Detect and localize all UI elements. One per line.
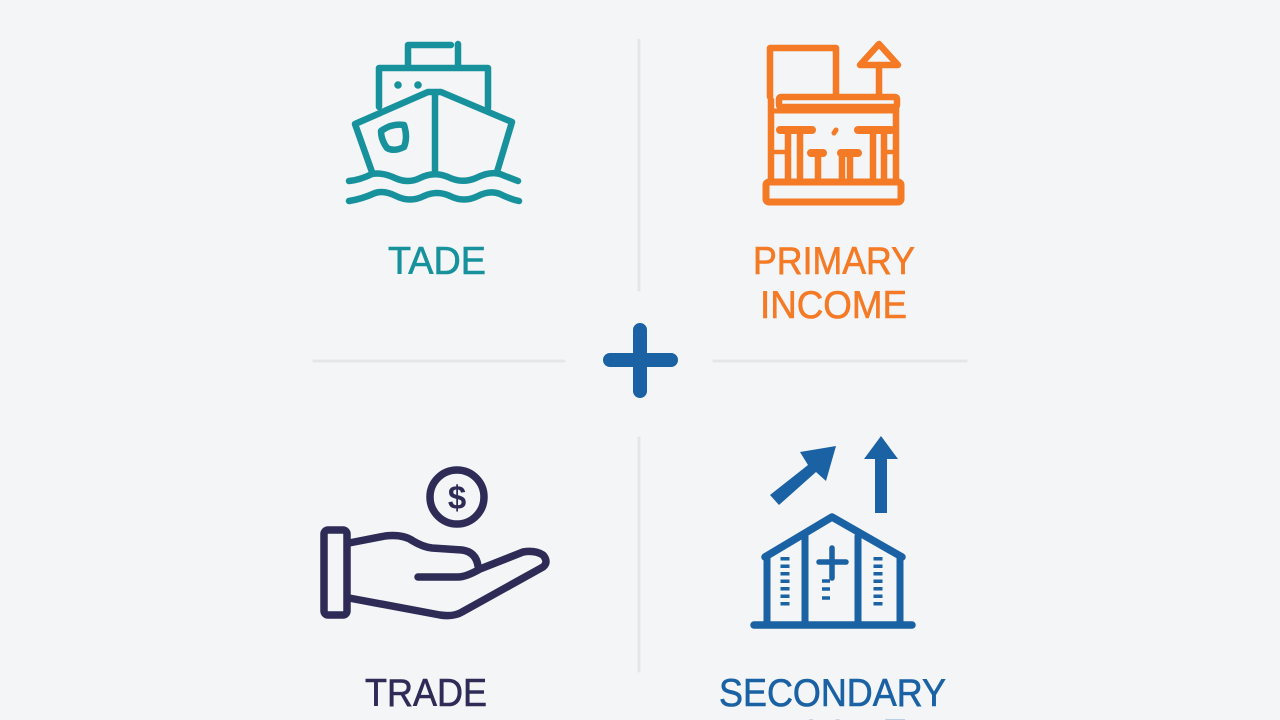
- label: TRADE: TRADE: [365, 672, 487, 715]
- icon: plus sign: [610, 330, 671, 391]
- icon: hand holding coin: [324, 470, 546, 616]
- label: SECONDARY INCOME: SECONDARY: [719, 672, 946, 715]
- icon: cargo ship: [349, 44, 519, 201]
- icon: hand holding coin: $: [448, 479, 466, 516]
- label: PRIMARY INCOME: PRIMARY: [753, 240, 915, 283]
- icon: building with growth arrows: [754, 436, 912, 625]
- icon: primary income building with arrow: [766, 44, 901, 202]
- label: TADE: TADE: [388, 240, 486, 283]
- label: PRIMARY INCOME: INCOME: [760, 284, 907, 327]
- label: PRIMARY INCOME: [753, 240, 915, 327]
